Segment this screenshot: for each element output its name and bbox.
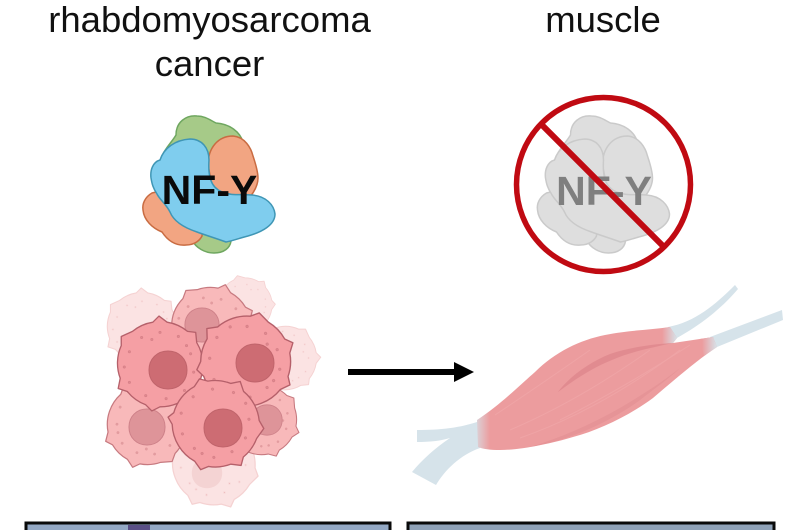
lower shading <box>530 368 680 447</box>
purple stain <box>128 525 150 530</box>
label: NF-Y greyed: NF-Y <box>556 168 652 214</box>
heading: muscle: muscle <box>545 0 661 40</box>
label: NF-Y: NF-Y <box>162 167 257 213</box>
muscle fibres <box>495 345 690 438</box>
middle layer cells <box>94 271 310 481</box>
protein subunit: green <box>161 116 250 253</box>
muscle belly <box>477 327 717 450</box>
protein subunit: orange <box>143 136 258 245</box>
muscle tendon blends <box>660 327 717 356</box>
illustration: muscle <box>412 285 783 485</box>
front cells with nuclei <box>117 302 309 488</box>
micrograph panel: left (cropped) <box>26 523 390 530</box>
icon: NF-Y absent, prohibition sign <box>516 98 690 272</box>
icon: NF-Y protein complex <box>143 116 275 253</box>
grey protein complex <box>537 116 670 253</box>
micrograph panel: right (cropped) <box>408 523 774 530</box>
faint background cells <box>107 264 321 521</box>
micrograph image area <box>26 523 390 530</box>
arrow: cancer to muscle <box>348 362 474 382</box>
heading: rhabdomyosarcoma cancer: cancer <box>155 43 264 84</box>
muscle groove <box>558 343 673 392</box>
red prohibition symbol <box>516 98 690 272</box>
illustration: cancer cell cluster <box>94 264 321 521</box>
protein subunit: blue <box>151 139 275 242</box>
tendons <box>412 285 783 485</box>
heading: rhabdomyosarcoma cancer: rhabdomyosarcoma <box>48 0 371 40</box>
